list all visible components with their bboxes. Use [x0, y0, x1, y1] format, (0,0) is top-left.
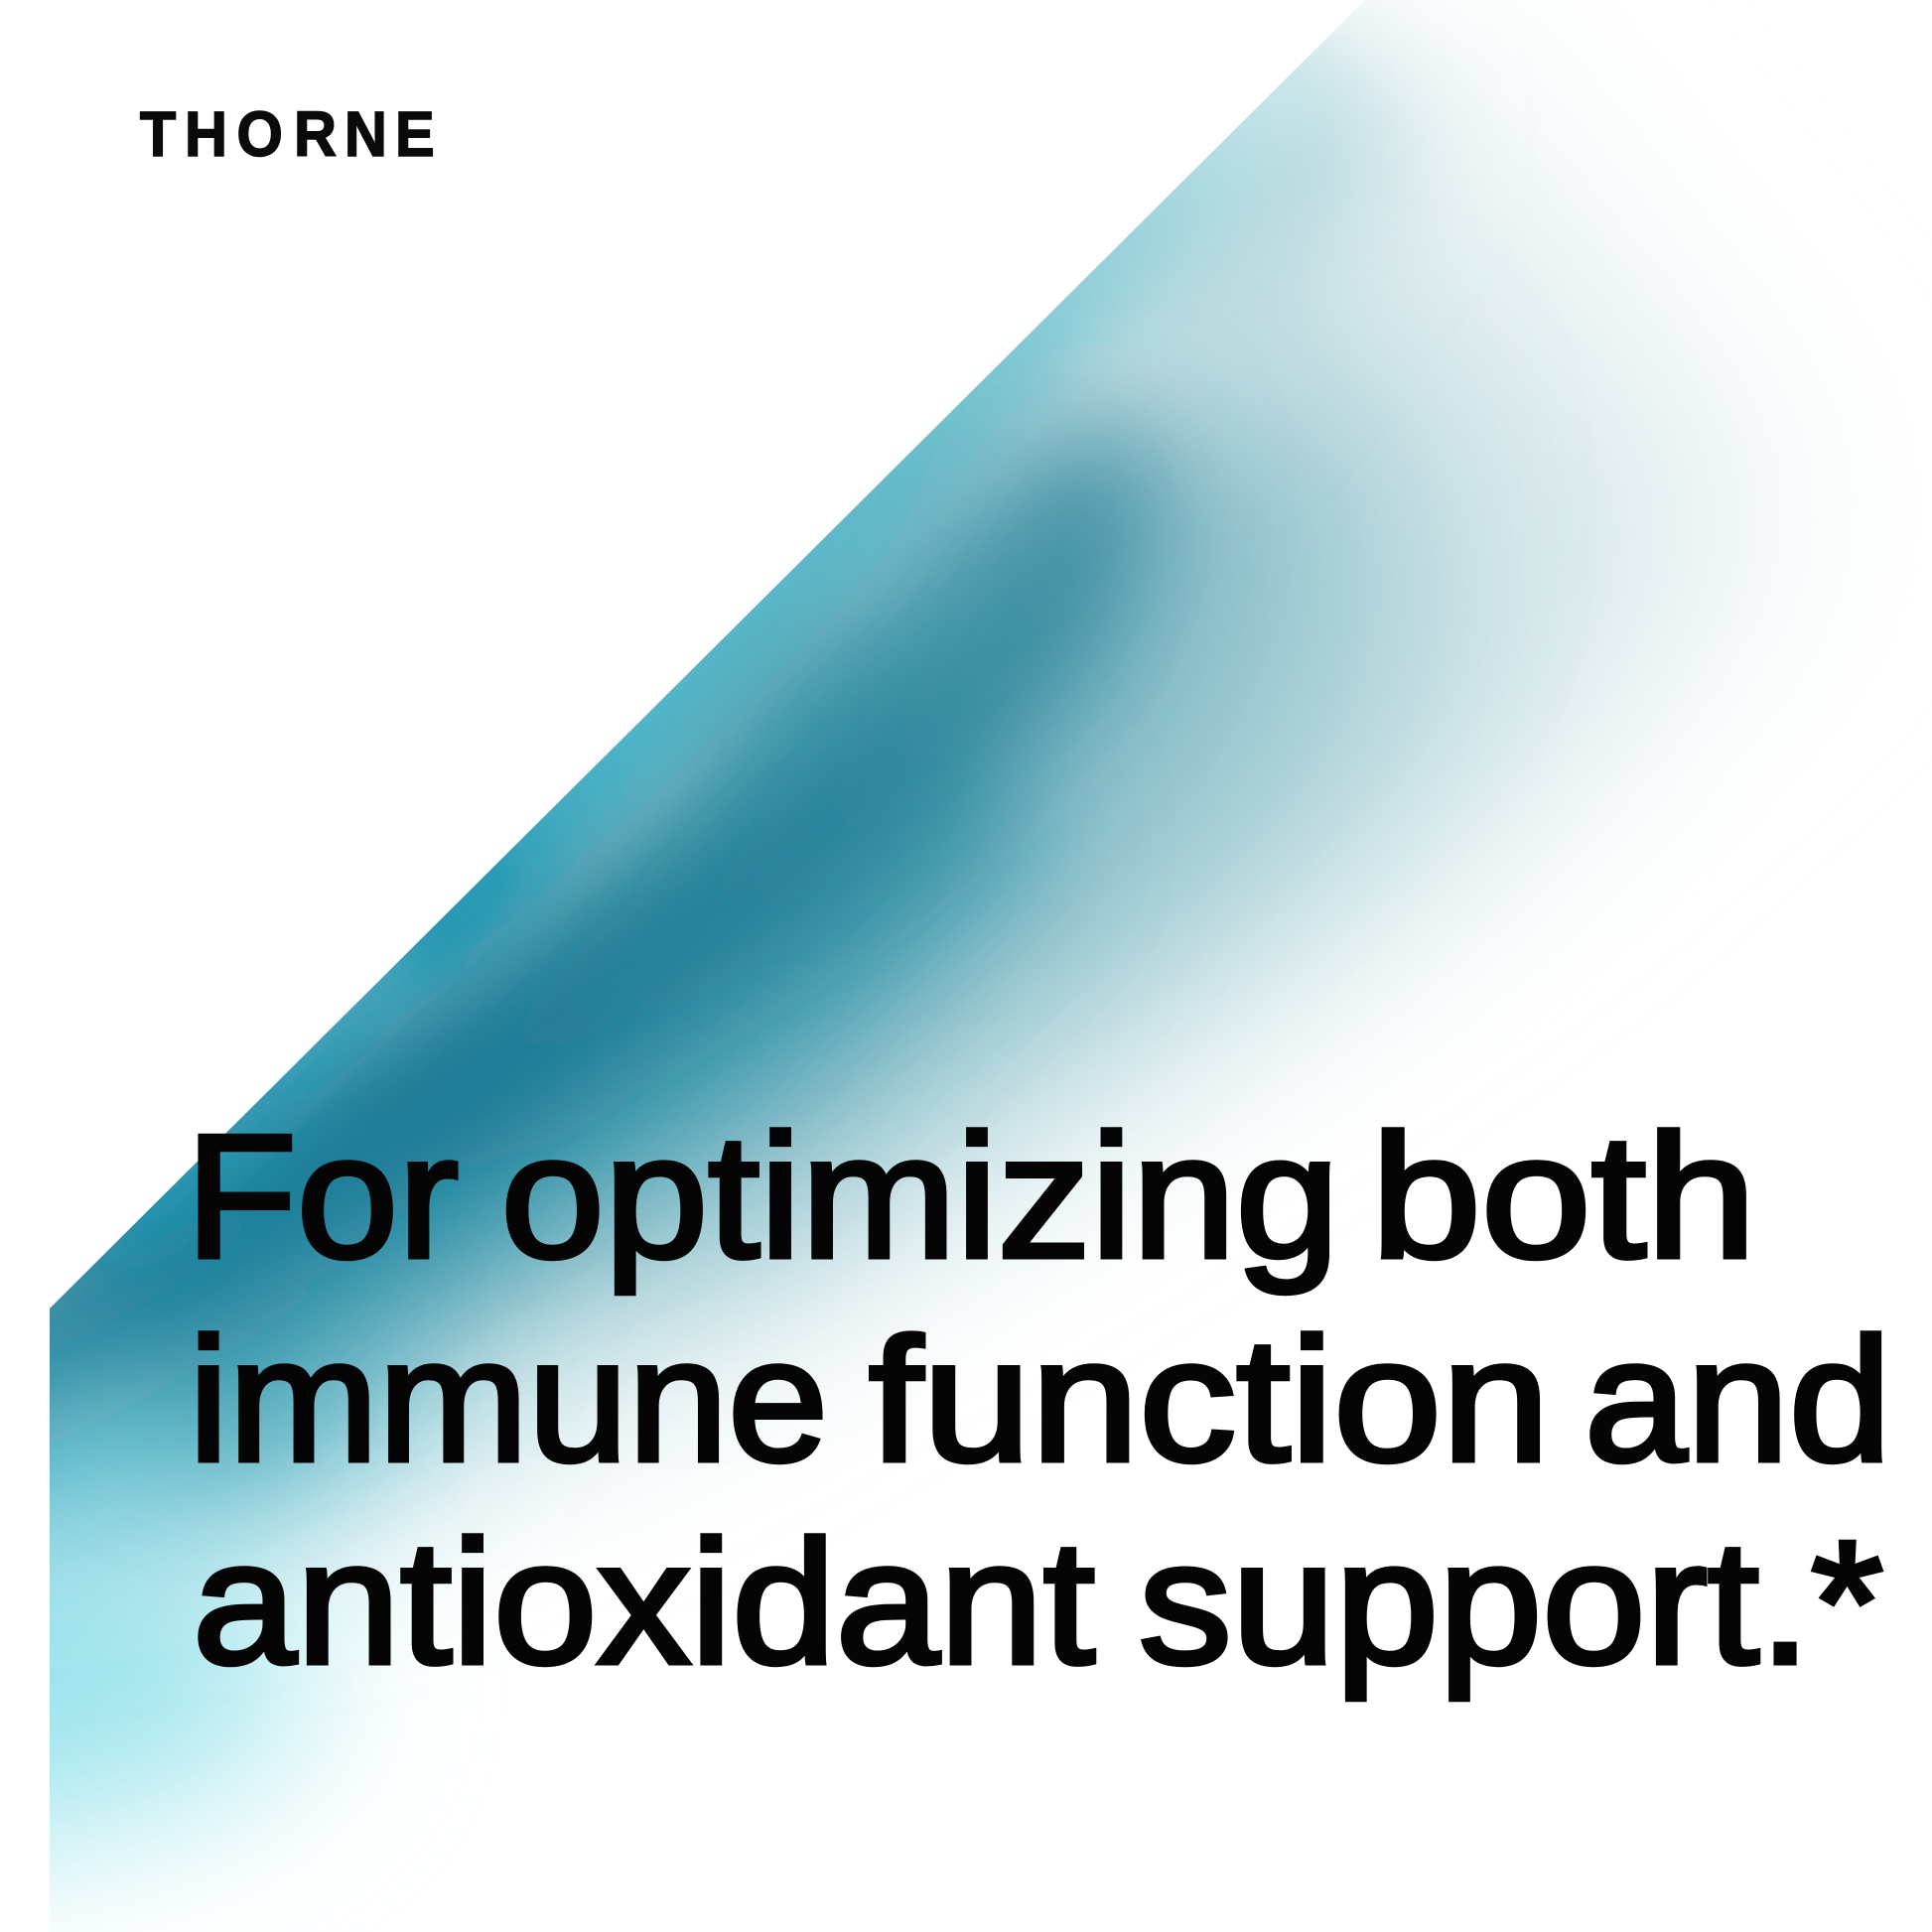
headline line 3: support.* [1139, 1504, 1883, 1701]
headline line 2: function [869, 1302, 1550, 1498]
headline line 2: and [1585, 1302, 1891, 1498]
headline line 2: immune [189, 1302, 828, 1498]
headline line 1: both [1371, 1098, 1756, 1295]
headline [186, 1098, 1891, 1701]
headline line 1: For [186, 1098, 459, 1295]
brand logo: THORNE: THORNE [140, 99, 435, 170]
headline line 1: optimizing [500, 1098, 1339, 1295]
headline line 3: antioxidant [193, 1504, 1095, 1701]
